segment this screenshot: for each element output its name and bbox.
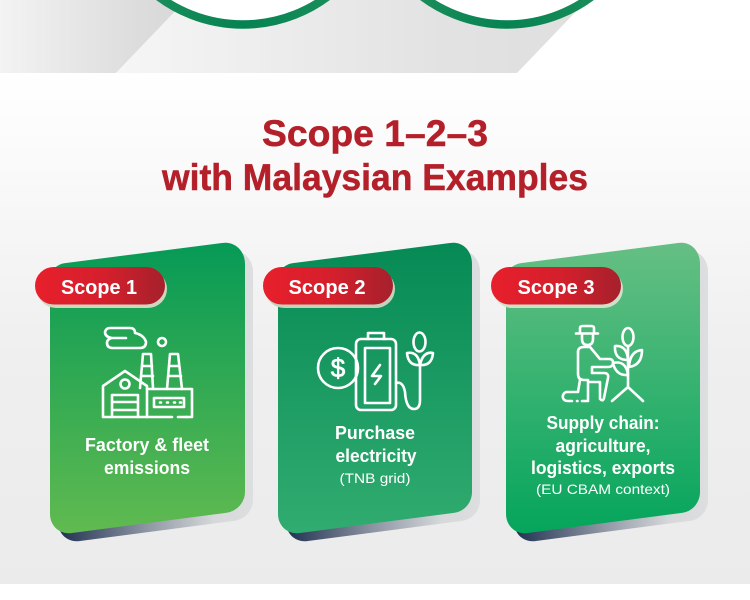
badge: scope 1	[35, 267, 167, 308]
green ring right	[366, 0, 648, 24]
badge: scope 2: Scope 2	[288, 277, 366, 299]
text: scope 2 description	[335, 423, 416, 486]
title: with Malaysian Examples	[161, 157, 588, 198]
badge: scope 3: Scope 3	[518, 277, 594, 299]
panel: scope 2	[263, 243, 480, 541]
green ring left	[102, 0, 384, 24]
text: scope 3 description: agriculture,	[556, 436, 650, 456]
text: scope 2 description: (TNB grid)	[340, 470, 410, 486]
text: scope 1 description	[85, 435, 209, 478]
badge: scope 3	[491, 267, 623, 308]
panel: scope 3	[491, 243, 708, 541]
badge: scope 1: Scope 1	[61, 277, 137, 299]
text: scope 2 description: electricity	[336, 446, 416, 466]
text: scope 1 description: Factory & fleet	[85, 435, 209, 455]
text: scope 1 description: emissions	[104, 458, 190, 478]
text: scope 3 description: (EU CBAM context)	[536, 481, 670, 497]
top banner remnant	[0, 0, 648, 73]
text: scope 3 description: logistics, exports	[531, 458, 675, 478]
badge: scope 2	[263, 267, 395, 308]
icon: factory	[103, 328, 192, 417]
icon: farmer and plant	[563, 326, 643, 401]
panel: scope 1	[35, 243, 253, 541]
title	[161, 113, 588, 198]
icon: battery with dollar and plant: $	[331, 353, 346, 383]
title: Scope 1–2–3	[262, 113, 488, 154]
text: scope 3 description	[531, 413, 675, 497]
icon: battery with dollar and plant	[318, 332, 433, 410]
text: scope 2 description: Purchase	[335, 423, 415, 443]
text: scope 3 description: Supply chain:	[546, 413, 660, 433]
